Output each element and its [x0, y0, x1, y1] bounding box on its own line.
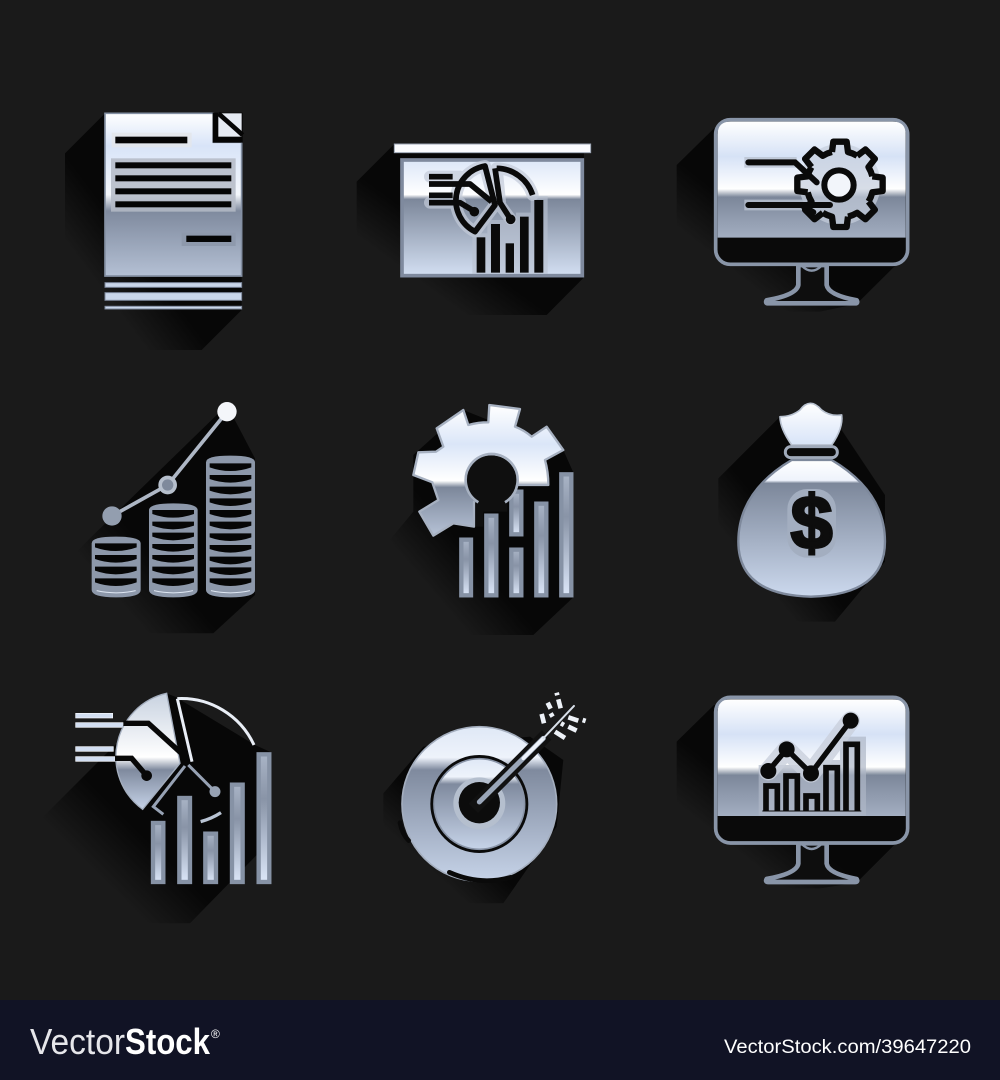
gear hub [824, 170, 854, 200]
growth line [112, 412, 227, 516]
arrow feathers [542, 693, 586, 738]
pie wedge [116, 693, 180, 809]
motion lines [748, 162, 830, 212]
chart halo [759, 721, 866, 816]
monitor body [716, 120, 908, 264]
icon: target with arrow [383, 693, 586, 903]
target disc [402, 727, 557, 881]
stack three [206, 456, 255, 597]
icon: presentation board with charts [357, 144, 591, 315]
gear body [413, 405, 563, 536]
icon: money bag [718, 403, 885, 622]
monitor shadow [677, 705, 909, 888]
open pie slice [177, 699, 254, 762]
pie shadow [40, 693, 271, 923]
bag shadow [718, 415, 885, 622]
text lines [111, 133, 236, 246]
icon: monitor with gear [677, 120, 909, 312]
pie chart and lines [429, 166, 533, 232]
folded corner [213, 113, 243, 143]
VectorStock logo: ® [211, 1027, 220, 1041]
monitor screen [718, 122, 906, 238]
target shadow [383, 737, 563, 903]
arrow shaft [473, 706, 574, 808]
board top bar [394, 144, 591, 153]
VectorStock logo [30, 1021, 220, 1062]
VectorStock logo: Stock [125, 1021, 211, 1062]
rim gaps [400, 823, 511, 881]
gear chart shadow [380, 410, 573, 635]
VectorStock logo: Vector [30, 1021, 125, 1062]
page stack strips [105, 283, 242, 309]
icon: monitor with line and bar chart [677, 697, 909, 888]
gear outline [797, 142, 883, 227]
circuit traces [115, 723, 181, 778]
bars [762, 744, 861, 811]
bars [461, 474, 571, 595]
coins shadow [55, 405, 255, 633]
bag neck [785, 447, 837, 458]
dollar sign: $ [791, 481, 833, 565]
icon: document [65, 113, 243, 350]
document page [105, 113, 242, 276]
monitor stand [766, 843, 857, 882]
target rings [430, 755, 528, 853]
icon: coin stacks with growth line [55, 402, 255, 633]
footer banner [0, 1000, 1000, 1080]
image id: VectorStock.com/39647220 [724, 1036, 971, 1058]
bars [477, 200, 543, 273]
icon: pie chart with bars [40, 693, 271, 923]
monitor body [716, 697, 908, 843]
board panel [402, 160, 582, 276]
bag body [738, 460, 885, 597]
connector lines [153, 765, 221, 822]
icon: gear with bar chart [380, 405, 573, 635]
monitor stand [766, 265, 857, 303]
line nodes [102, 402, 237, 526]
dollar halo [787, 489, 836, 558]
stand notch [802, 844, 822, 849]
stack one [92, 537, 141, 597]
speed lines [76, 713, 123, 761]
board shadow [357, 144, 591, 315]
bag knot [780, 403, 842, 445]
document shadow [65, 113, 242, 350]
trend line [760, 713, 859, 781]
gear halo [744, 144, 881, 225]
monitor screen [718, 699, 906, 816]
bars [153, 754, 269, 882]
monitor shadow [677, 128, 909, 312]
stack two [149, 503, 198, 597]
stand notch [802, 266, 822, 271]
gear hole [465, 454, 518, 527]
chart halo [430, 166, 548, 274]
